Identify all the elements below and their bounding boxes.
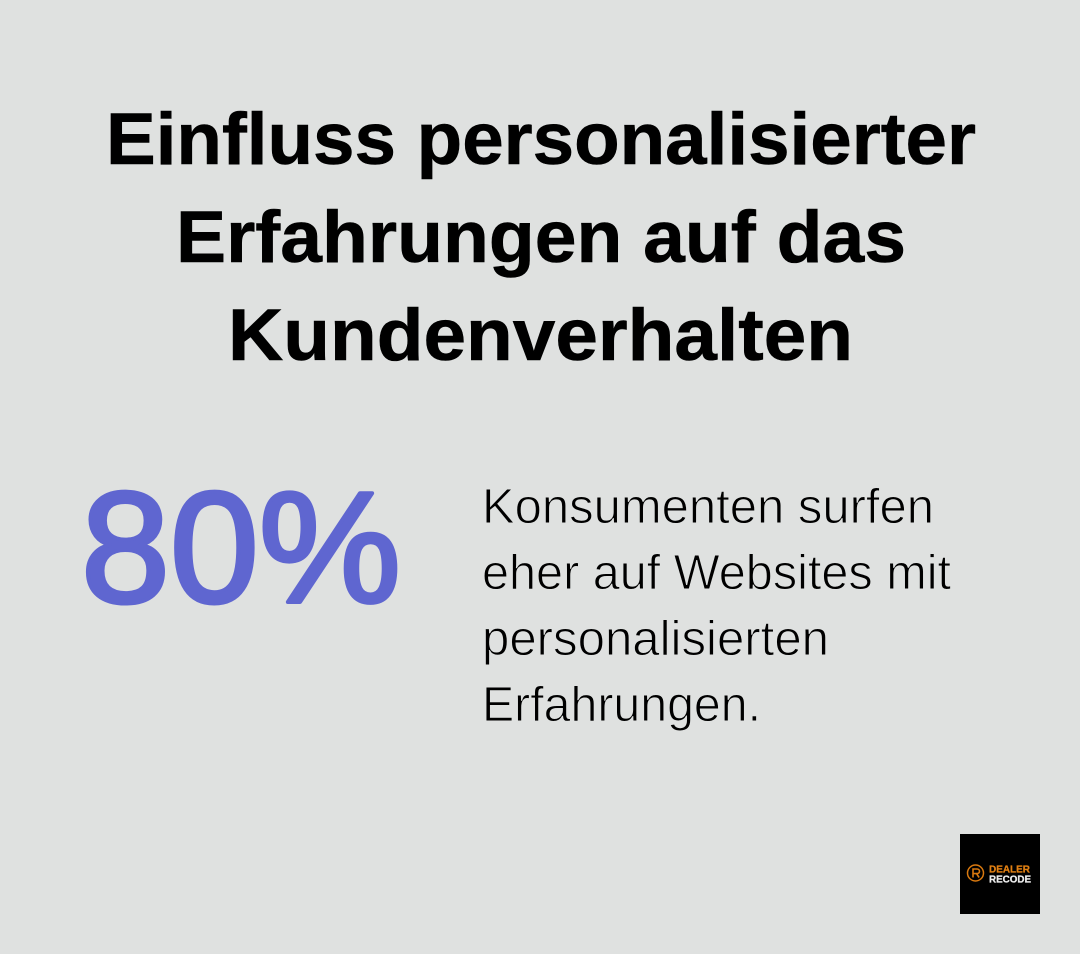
logo wordmark: DEALER xyxy=(989,864,1031,876)
statistic description: Konsumenten surfen xyxy=(482,480,934,534)
statistic description xyxy=(482,480,951,732)
icon: logo circle with R xyxy=(968,865,984,881)
title: Einfluss personalisierter xyxy=(106,99,976,180)
title: Erfahrungen auf das xyxy=(176,197,906,278)
statistic description: eher auf Websites mit xyxy=(482,546,951,600)
title xyxy=(106,99,976,376)
big statistic: 80%: 80% xyxy=(81,460,401,636)
statistic description: Erfahrungen. xyxy=(482,678,761,732)
logo: Dealer Recode xyxy=(960,834,1040,914)
logo wordmark: RECODE xyxy=(989,874,1031,886)
statistic description: personalisierten xyxy=(482,612,829,666)
logo wordmark xyxy=(989,864,1031,886)
title: Kundenverhalten xyxy=(228,295,853,376)
